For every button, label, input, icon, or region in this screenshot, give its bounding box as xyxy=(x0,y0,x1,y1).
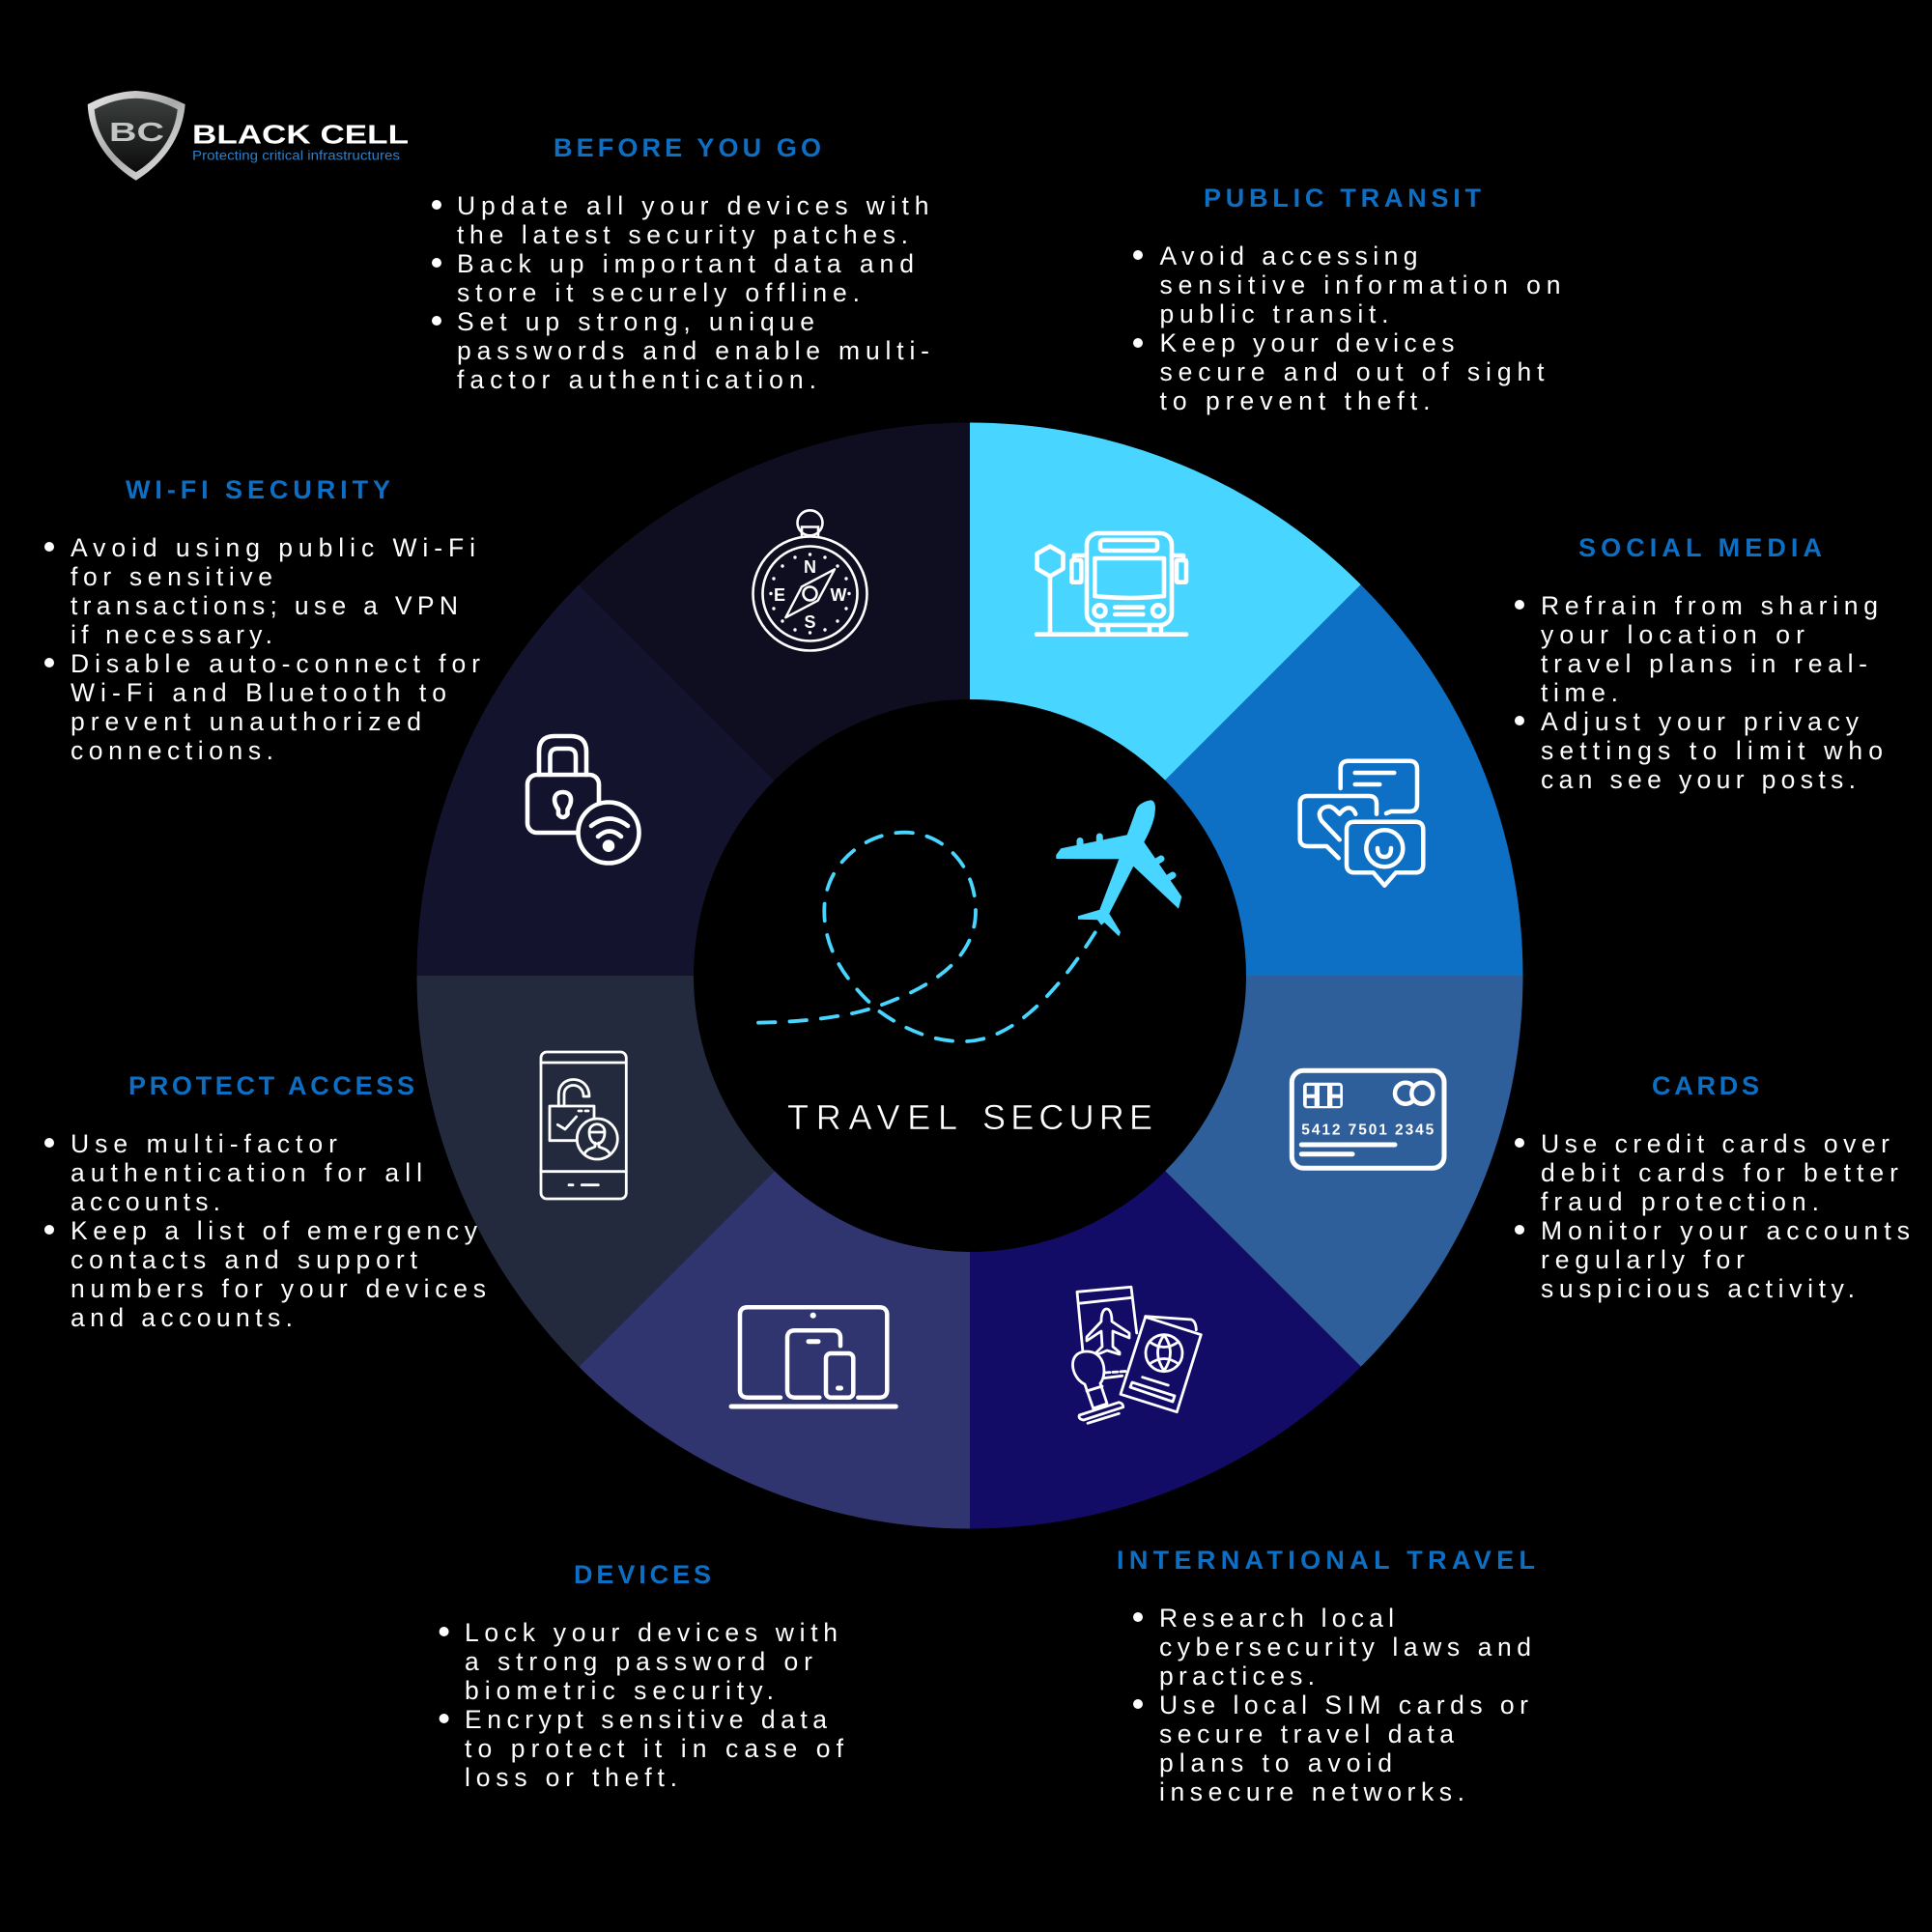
list: if necessary. xyxy=(71,620,272,649)
list: to protect it in case of xyxy=(465,1734,844,1763)
logo: Black Cell xyxy=(88,91,409,181)
heading: PROTECT ACCESS xyxy=(128,1071,414,1100)
list: suspicious activity. xyxy=(1541,1274,1855,1303)
segment: protect access xyxy=(417,976,775,1367)
segment: cards xyxy=(1165,976,1522,1367)
title xyxy=(787,1097,1152,1137)
list: Disable auto-connect for xyxy=(71,649,480,678)
panel: protect access xyxy=(44,1071,486,1332)
list: time. xyxy=(1541,678,1618,707)
list: factor authentication. xyxy=(457,365,816,394)
icon: chat bubbles xyxy=(1300,761,1423,886)
list: the latest security patches. xyxy=(457,220,908,249)
list: regularly for xyxy=(1541,1245,1745,1274)
panel: wi-fi security xyxy=(44,475,480,765)
segment: wi-fi security xyxy=(417,584,775,976)
heading: INTERNATIONAL TRAVEL xyxy=(1117,1546,1535,1575)
list: Wi-Fi and Bluetooth to xyxy=(71,678,446,707)
heading: WI-FI SECURITY xyxy=(126,475,390,504)
list: Keep your devices xyxy=(1159,328,1455,357)
list: a strong password or xyxy=(465,1647,812,1676)
list: Set up strong, unique xyxy=(457,307,814,336)
list: Back up important data and xyxy=(457,249,914,278)
list xyxy=(44,1129,486,1332)
list: Encrypt sensitive data xyxy=(465,1705,827,1734)
panel: international travel xyxy=(1117,1546,1535,1806)
list xyxy=(1515,591,1883,794)
list: your location or xyxy=(1541,620,1804,649)
list: contacts and support xyxy=(71,1245,418,1274)
list: loss or theft. xyxy=(465,1763,677,1792)
segment: international travel xyxy=(970,1171,1361,1528)
list: authentication for all xyxy=(71,1158,422,1187)
list: public transit. xyxy=(1159,299,1389,328)
list xyxy=(1133,1604,1531,1806)
list: settings to limit who xyxy=(1541,736,1883,765)
list: Refrain from sharing xyxy=(1541,591,1878,620)
list: store it securely offline. xyxy=(457,278,860,307)
heading: BEFORE YOU GO xyxy=(554,133,821,162)
segment: before you go xyxy=(579,423,970,781)
icon: airplane xyxy=(1056,800,1181,936)
heading: PUBLIC TRANSIT xyxy=(1204,184,1482,213)
list: biometric security. xyxy=(465,1676,774,1705)
icon: ticket passport and stamp xyxy=(1072,1287,1201,1423)
list: secure and out of sight xyxy=(1159,357,1545,386)
list: Research local xyxy=(1159,1604,1394,1633)
list: Use multi-factor xyxy=(71,1129,337,1158)
list: for sensitive xyxy=(71,562,272,591)
icon: phone with lock and user xyxy=(541,1052,626,1199)
icon: shield xyxy=(88,91,185,181)
icon: padlock with wi-fi xyxy=(527,736,639,864)
panel: before you go xyxy=(432,133,929,394)
icon: shield: BC xyxy=(109,117,164,147)
list: and accounts. xyxy=(71,1303,293,1332)
heading: DEVICES xyxy=(574,1560,711,1589)
list: Lock your devices with xyxy=(465,1618,838,1647)
list: practices. xyxy=(1159,1662,1315,1690)
list: passwords and enable multi- xyxy=(457,336,929,365)
list xyxy=(1133,242,1561,415)
list: Update all your devices with xyxy=(457,191,929,220)
list: fraud protection. xyxy=(1541,1187,1819,1216)
icon: bus at stop xyxy=(1037,533,1186,635)
icon: compass: W xyxy=(831,585,846,605)
list xyxy=(432,191,929,394)
panel: devices xyxy=(440,1560,844,1792)
list: Adjust your privacy xyxy=(1541,707,1860,736)
panel: social media xyxy=(1515,533,1883,794)
icon: compass: N xyxy=(804,557,816,577)
list: Use credit cards over xyxy=(1541,1129,1889,1158)
heading: CARDS xyxy=(1652,1071,1759,1100)
list: Avoid using public Wi-Fi xyxy=(71,533,475,562)
list: cybersecurity laws and xyxy=(1159,1633,1531,1662)
list: transactions; use a VPN xyxy=(71,591,458,620)
list: prevent unauthorized xyxy=(71,707,421,736)
title: TRAVEL xyxy=(787,1097,957,1137)
list: debit cards for better xyxy=(1541,1158,1898,1187)
heading: SOCIAL MEDIA xyxy=(1578,533,1822,562)
icon: compass: E xyxy=(774,585,785,605)
list: numbers for your devices xyxy=(71,1274,486,1303)
title: SECURE xyxy=(982,1097,1152,1137)
list: to prevent theft. xyxy=(1159,386,1430,415)
icon: credit card xyxy=(1292,1070,1444,1168)
logo tagline: Protecting critical infrastructures xyxy=(192,149,400,162)
list: accounts. xyxy=(71,1187,220,1216)
panel: cards xyxy=(1515,1071,1910,1303)
list: Keep a list of emergency xyxy=(71,1216,478,1245)
list: plans to avoid xyxy=(1159,1748,1392,1777)
list: Monitor your accounts xyxy=(1541,1216,1910,1245)
segment: public transit xyxy=(970,423,1361,781)
list: sensitive information on xyxy=(1159,270,1561,299)
panel: public transit xyxy=(1133,184,1561,415)
list xyxy=(1515,1129,1910,1303)
icon: laptop tablet phone xyxy=(731,1307,895,1406)
list: Avoid accessing xyxy=(1159,242,1418,270)
list: travel plans in real- xyxy=(1541,649,1867,678)
list: can see your posts. xyxy=(1541,765,1856,794)
logo name: BLACK CELL xyxy=(192,119,409,149)
center: travel secure emblem xyxy=(758,800,1181,1137)
list xyxy=(440,1618,844,1792)
icon: credit card: 5412 7501 2345 xyxy=(1301,1122,1435,1138)
list xyxy=(44,533,480,765)
list: connections. xyxy=(71,736,273,765)
icon: compass: S xyxy=(804,612,816,632)
list: Use local SIM cards or xyxy=(1159,1690,1528,1719)
icon: compass xyxy=(753,510,867,651)
segment: social media xyxy=(1165,584,1522,976)
dashed flight path xyxy=(758,833,1098,1041)
segment: devices xyxy=(579,1171,970,1528)
list: insecure networks. xyxy=(1159,1777,1464,1806)
list: secure travel data xyxy=(1159,1719,1454,1748)
